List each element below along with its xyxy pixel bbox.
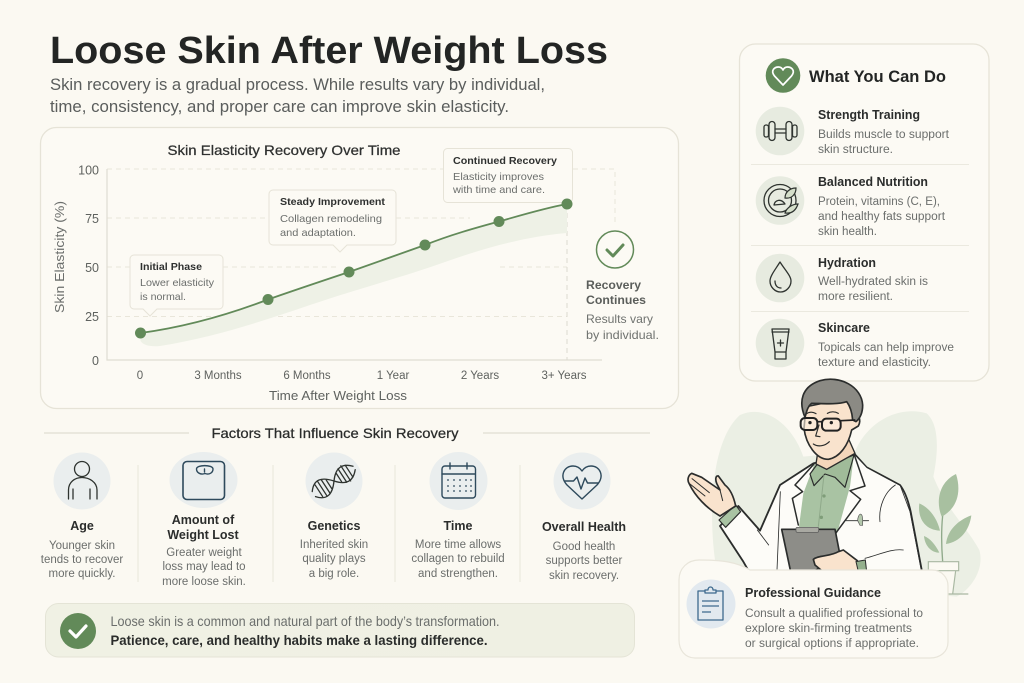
factor: overall health: Good health (553, 541, 615, 553)
background blobs (712, 411, 981, 597)
factor: amount of weight lost: loss may lead to (162, 561, 246, 573)
panel: professional guidance: explore skin-firming treatments (745, 623, 912, 635)
holding hand (813, 550, 860, 573)
panel heading: What You Can Do (809, 68, 946, 86)
factor: age: Younger skin (49, 540, 115, 552)
subtitle (50, 76, 545, 116)
factor: amount of weight lost: Weight Lost (167, 528, 239, 542)
icon: scale (170, 452, 238, 508)
item: strength training: Builds muscle to support (818, 129, 950, 141)
illustration: doctor with plant (688, 379, 981, 597)
factor: genetics: quality plays (302, 553, 366, 565)
callout: continued recovery: with time and care. (452, 184, 545, 196)
icon: tube (756, 319, 804, 367)
panel: professional guidance: Consult a qualified professional to (745, 608, 923, 620)
panel: professional guidance: Professional Guidance (745, 586, 881, 600)
subtitle: Skin recovery is a gradual process. While results vary by individual, (50, 76, 545, 94)
y axis numbers: 0 (92, 354, 99, 368)
factor: overall health (542, 452, 626, 582)
callout: steady improvement: Collagen remodeling (280, 213, 382, 225)
factors heading: Factors That Influence Skin Recovery (212, 425, 458, 441)
factor: amount of weight lost (162, 452, 246, 588)
x axis labels (137, 370, 587, 382)
y axis numbers: 100 (78, 164, 99, 178)
callout: initial phase: Lower elasticity (140, 277, 215, 289)
factor: overall health: Overall Health (542, 520, 626, 534)
item: strength training: skin structure. (818, 144, 893, 156)
icon: water drop (756, 254, 804, 302)
icon: recovery check (596, 231, 634, 268)
y axis numbers (78, 164, 99, 368)
recovery continues note: Recovery (586, 278, 641, 292)
icon: person (54, 452, 110, 510)
title: Loose Skin After Weight Loss (50, 30, 608, 72)
right lapel (836, 455, 920, 570)
x axis labels: 2 Years (461, 370, 499, 382)
left lapel (778, 464, 814, 570)
shirt collar (810, 455, 854, 487)
y axis numbers: 25 (85, 310, 99, 324)
item: balanced nutrition: Balanced Nutrition (818, 175, 928, 189)
factor: time: Time (444, 519, 473, 533)
raised arm cuff (719, 505, 741, 527)
line chart (107, 169, 615, 360)
factor: amount of weight lost: Greater weight (166, 547, 243, 559)
factor: age: tends to recover (41, 554, 123, 566)
callout: steady improvement: Steady Improvement (280, 196, 385, 208)
x axis title: Time After Weight Loss (269, 389, 407, 403)
x axis labels: 0 (137, 370, 143, 382)
item: balanced nutrition: Protein, vitamins (C, E), (818, 196, 940, 208)
item: hydration: more resilient. (818, 291, 893, 303)
callout: initial phase: is normal. (140, 291, 186, 303)
factor: genetics: Inherited skin (300, 539, 368, 551)
icon: heart pulse (554, 452, 610, 510)
factor: time: and strengthen. (418, 568, 498, 580)
factor: genetics: a big role. (309, 568, 359, 580)
recovery continues note: Continues (586, 293, 646, 307)
item: balanced nutrition: skin health. (818, 226, 877, 238)
item: strength training: Strength Training (818, 108, 920, 122)
item: balanced nutrition (756, 175, 946, 238)
recovery continues note (586, 278, 659, 342)
icon: clipboard (686, 580, 736, 628)
shirt (798, 454, 854, 535)
banner: Patience, care, and healthy habits make a lasting difference. (110, 632, 488, 648)
coat (720, 453, 922, 573)
plant (919, 474, 971, 594)
factor: time: More time allows (415, 539, 501, 551)
factor: amount of weight lost: Amount of (172, 513, 235, 527)
x axis labels: 3+ Years (541, 370, 587, 382)
y axis numbers: 50 (85, 261, 99, 275)
icon: banner check (60, 613, 96, 649)
callout: continued recovery (444, 148, 572, 202)
item: hydration: Hydration (818, 256, 876, 270)
item: skincare (756, 319, 954, 369)
item: skincare: texture and elasticity. (818, 357, 931, 369)
x axis labels: 3 Months (194, 370, 242, 382)
factor: overall health: supports better (546, 555, 623, 567)
chart title: Skin Elasticity Recovery Over Time (168, 142, 401, 158)
banner (46, 604, 634, 657)
banner: Loose skin is a common and natural part of the body’s transformation. (110, 613, 500, 629)
x axis labels: 1 Year (377, 370, 409, 382)
factor: genetics (300, 452, 368, 580)
factor: genetics: Genetics (308, 519, 360, 533)
panel: skin elasticity chart (40, 128, 678, 408)
panel: professional guidance: or surgical options if appropriate. (745, 638, 919, 650)
icon: heart badge (766, 58, 800, 93)
icon: calendar (430, 452, 488, 510)
factor: time: collagen to rebuild (411, 553, 505, 565)
factor: overall health: skin recovery. (549, 570, 619, 582)
panel: professional guidance (679, 560, 948, 658)
icon: dna (306, 452, 362, 510)
callout: steady improvement: and adaptation. (280, 227, 356, 239)
x axis labels: 6 Months (283, 370, 331, 382)
callout: continued recovery: Elasticity improves (453, 171, 544, 183)
factor: age: Age (70, 519, 94, 533)
neck (816, 438, 855, 469)
factor: age (41, 452, 123, 580)
callout: initial phase (130, 255, 223, 316)
callout: continued recovery: Continued Recovery (453, 155, 557, 167)
recovery continues note: Results vary (586, 312, 653, 326)
item: hydration (756, 254, 928, 303)
y axis label: Skin Elasticity (%) (53, 201, 67, 313)
y axis numbers: 75 (85, 212, 99, 226)
item: strength training (756, 107, 950, 156)
panel: what you can do (740, 44, 989, 381)
item: skincare: Skincare (818, 321, 870, 335)
factor: time (411, 452, 505, 580)
callout: initial phase: Initial Phase (140, 261, 202, 273)
pocket and coat folds (757, 485, 921, 570)
recovery continues note: by individual. (586, 328, 659, 342)
factor: age: more quickly. (49, 568, 115, 580)
callout: steady improvement (269, 190, 396, 252)
subtitle: time, consistency, and proper care can improve skin elasticity. (50, 98, 509, 116)
item: hydration: Well-hydrated skin is (818, 276, 928, 288)
icon: plate with leaves (756, 176, 804, 225)
icon: dumbbell (756, 107, 804, 155)
head (801, 379, 863, 459)
raised hand (688, 473, 736, 516)
factor: amount of weight lost: more loose skin. (162, 576, 246, 588)
item: skincare: Topicals can help improve (818, 342, 954, 354)
item: balanced nutrition: and healthy fats support (818, 211, 946, 223)
clipboard (782, 527, 840, 572)
